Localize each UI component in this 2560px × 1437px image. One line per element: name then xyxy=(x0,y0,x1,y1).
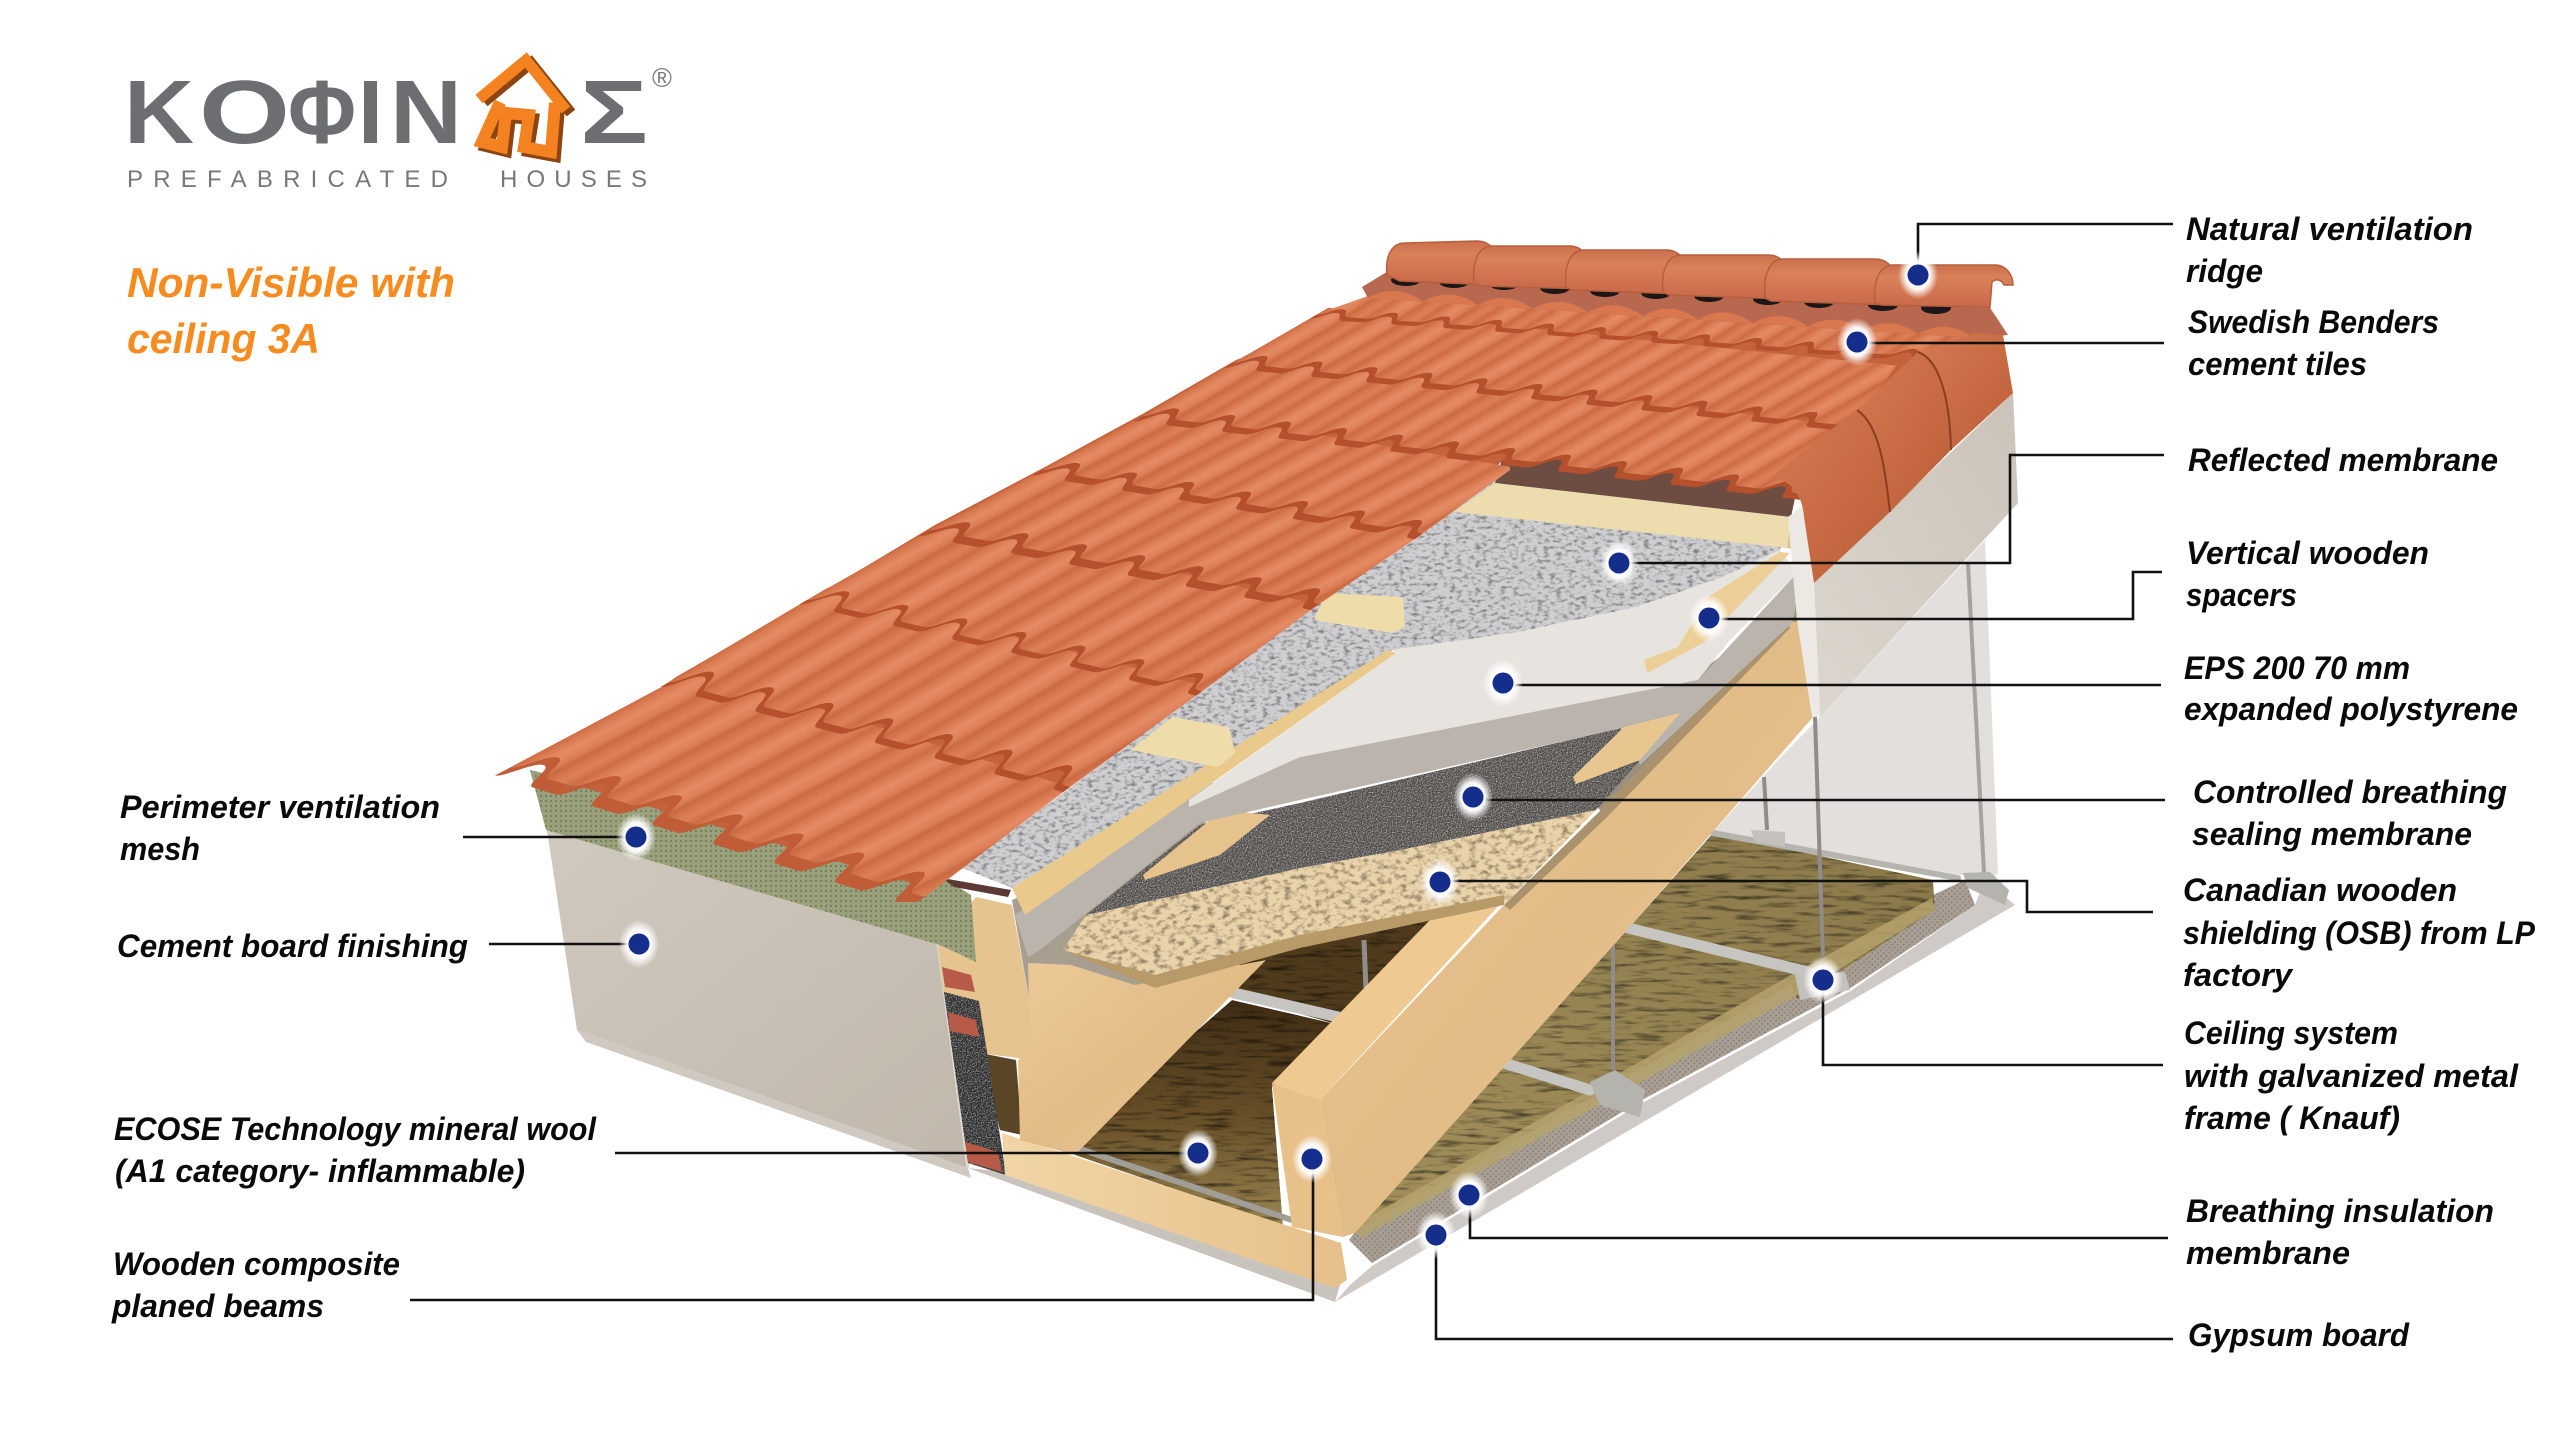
callout: perimeter ventilation mesh xyxy=(120,789,656,867)
callout: cement tiles: Swedish Benders xyxy=(2188,304,2439,340)
logo wordmark: Ι xyxy=(358,63,383,163)
callout: vertical wooden spacers: Vertical wooden xyxy=(2186,535,2429,571)
callout: wooden composite planed beams: planed beams xyxy=(111,1288,324,1324)
callout: perimeter ventilation mesh: mesh xyxy=(120,831,200,867)
gable board xyxy=(1788,393,2018,717)
ridge mortar strip xyxy=(1362,270,2008,338)
callout: ECOSE mineral wool: (A1 category- inflammable) xyxy=(115,1153,525,1189)
middle wooden spacer xyxy=(1573,713,1680,784)
main composite beam xyxy=(1272,620,1815,1237)
callout: perimeter ventilation mesh: Perimeter ventilation xyxy=(120,789,440,825)
hanger rods and brackets xyxy=(1364,563,2009,1117)
dark under-tile space xyxy=(1495,450,1801,517)
callout: vertical wooden spacers xyxy=(1689,535,2429,642)
callout: wooden composite planed beams xyxy=(111,1135,1332,1324)
title: Non-Visible with xyxy=(127,259,455,306)
callout: reflected membrane xyxy=(1599,442,2498,587)
rafter wood strip xyxy=(1012,650,1396,915)
controlled breathing sealing membrane xyxy=(1086,728,1640,915)
wall timber xyxy=(938,897,1034,1060)
callout: EPS: EPS 200 70 mm xyxy=(2184,650,2410,686)
logo wordmark xyxy=(124,63,648,163)
top batten xyxy=(1454,483,1800,550)
logo wordmark: Φ xyxy=(288,63,356,163)
lower wooden spacer xyxy=(1143,810,1270,880)
callout: natural ventilation ridge: Natural ventilation xyxy=(2186,211,2473,247)
logo wordmark: Ν xyxy=(390,63,462,163)
perimeter ventilation mesh xyxy=(530,770,976,962)
callout: ECOSE mineral wool xyxy=(114,1111,1218,1189)
callout: natural ventilation ridge xyxy=(1898,211,2473,299)
logo wordmark: Κ xyxy=(124,63,194,163)
gypsum board xyxy=(577,880,2015,1302)
logo wordmark: Σ xyxy=(580,63,648,163)
callout: ceiling system xyxy=(1803,956,2519,1136)
reflected membrane foil xyxy=(962,470,1795,888)
far translucent gable panel xyxy=(1713,540,1998,880)
EPS expanded polystyrene xyxy=(1015,550,1797,957)
upper wooden spacer xyxy=(1644,552,1790,673)
callout: cement board finishing xyxy=(117,920,659,968)
breathing insulation membrane strip xyxy=(1349,880,1975,1263)
registered mark: ® xyxy=(652,63,672,93)
lower batten xyxy=(1131,593,1405,767)
cement board finishing xyxy=(547,830,968,1168)
callout: reflected membrane: Reflected membrane xyxy=(2188,442,2498,478)
galvanized metal frame rails xyxy=(1068,833,1958,1220)
callout: controlled breathing membrane: Controlled breathing xyxy=(2193,774,2507,810)
left composite beam xyxy=(1018,960,1266,1155)
callout: breathing insulation membrane: membrane xyxy=(2186,1235,2350,1271)
callout: ceiling system: with galvanized metal xyxy=(2184,1058,2519,1094)
title: ceiling 3A xyxy=(127,315,320,362)
roof tiles: Swedish Benders cement tiles xyxy=(495,296,1963,902)
callout: cement board finishing: Cement board finishing xyxy=(117,928,468,964)
logo tagline: PREFABRICATED xyxy=(127,166,448,193)
callout: cement tiles: cement tiles xyxy=(2188,346,2367,382)
wooden base plate xyxy=(1002,1133,1347,1288)
ridge vent gaps xyxy=(1391,274,1951,314)
tile backing xyxy=(540,296,1975,885)
icon: orange house xyxy=(479,60,571,156)
callout: breathing insulation membrane xyxy=(1449,1171,2494,1271)
barge cap tiles xyxy=(1770,333,2013,583)
black membrane strip xyxy=(942,967,1006,1175)
callout: gypsum board: Gypsum board xyxy=(2188,1317,2410,1353)
illustration: roof cross-section xyxy=(495,241,2018,1302)
top tile scallops xyxy=(1368,291,1973,338)
logo xyxy=(124,60,672,193)
callout: gypsum board xyxy=(1416,1211,2410,1353)
callout: natural ventilation ridge: ridge xyxy=(2186,253,2263,289)
callout: OSB: factory xyxy=(2183,957,2294,993)
callout: ECOSE mineral wool: ECOSE Technology mineral wool xyxy=(114,1111,597,1147)
title xyxy=(127,259,455,362)
brown eave flashing xyxy=(942,878,1011,897)
OSB shielding xyxy=(1063,810,1596,988)
cavity behind layers xyxy=(1012,820,1300,1010)
callout: ceiling system: frame ( Knauf) xyxy=(2184,1100,2400,1136)
mineral wool between rafters xyxy=(980,833,1935,1238)
callout: vertical wooden spacers: spacers xyxy=(2186,577,2297,613)
callout: OSB xyxy=(1420,858,2536,993)
callout: EPS xyxy=(1483,650,2518,727)
callout: ceiling system: Ceiling system xyxy=(2184,1015,2398,1051)
ridge caps xyxy=(1387,241,2013,307)
shadow seam behind rafter xyxy=(1590,600,1800,830)
callout: controlled breathing membrane: sealing membrane xyxy=(2192,816,2472,852)
callout: EPS: expanded polystyrene xyxy=(2184,691,2518,727)
logo wordmark: Ο xyxy=(199,63,290,163)
callout: wooden composite planed beams: Wooden composite xyxy=(113,1246,400,1282)
callout: controlled breathing membrane xyxy=(1453,773,2507,852)
logo tagline xyxy=(127,166,647,193)
callout: breathing insulation membrane: Breathing insulation xyxy=(2186,1193,2494,1229)
logo tagline: HOUSES xyxy=(500,166,647,193)
callout: cement tiles xyxy=(1837,304,2439,382)
callout: OSB: Canadian wooden xyxy=(2183,872,2457,908)
callout: OSB: shielding (OSB) from LP xyxy=(2183,915,2536,951)
